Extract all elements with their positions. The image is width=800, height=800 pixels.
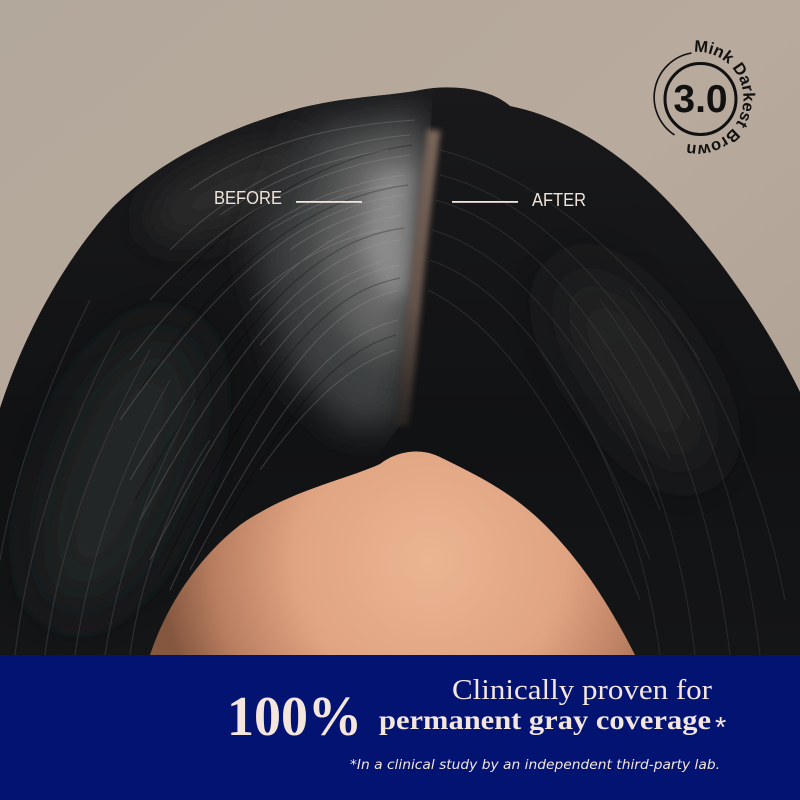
badge shade name on curve [671, 52, 743, 145]
badge outer arc [654, 53, 692, 135]
photo: hair before and after [0, 87, 800, 655]
after label: AFTER [532, 190, 586, 210]
headline line 1: Clinically proven for [452, 675, 713, 706]
footnote: *In a clinical study by an independent third-party lab. [350, 758, 720, 773]
navy banner [0, 655, 800, 800]
before line [296, 201, 362, 203]
right strands [428, 150, 785, 655]
shade badge: Mink Darkest Brown [687, 40, 756, 154]
before label: BEFORE [214, 188, 282, 208]
part line [402, 130, 434, 425]
left strands [120, 120, 415, 590]
forehead skin [150, 451, 635, 655]
100% figure: 100% [227, 686, 362, 748]
asterisk: * [715, 712, 726, 744]
shade badge [653, 40, 756, 154]
badge inner ring [665, 64, 736, 134]
after line [452, 201, 518, 203]
badge number: 3.0 [673, 78, 728, 121]
headline line 2: permanent gray coverage [379, 705, 711, 735]
